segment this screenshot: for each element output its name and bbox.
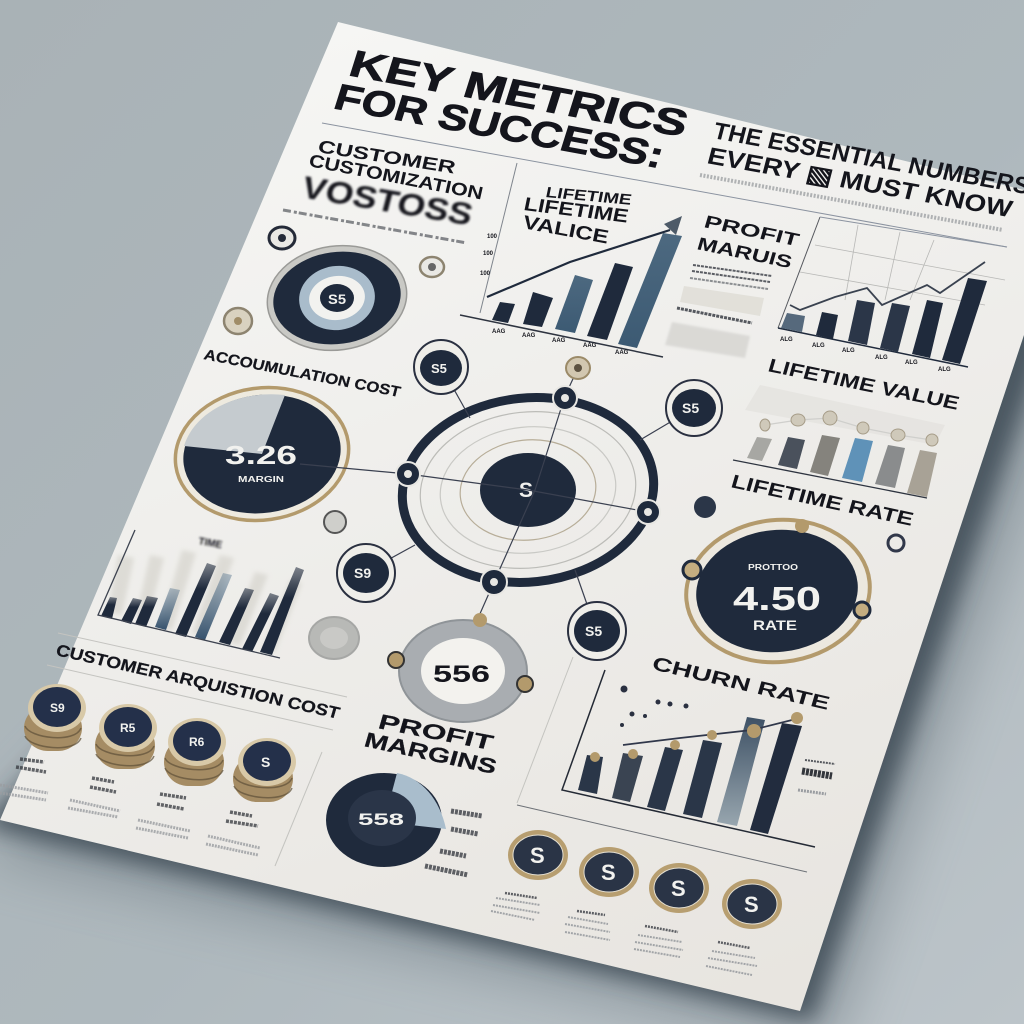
axis labels: ALG [812, 343, 825, 349]
subtitle: EVERY ▧ MUST KNOW [704, 143, 1016, 223]
heading: LIFETIME [544, 184, 633, 209]
panel: profit margin gauge: 556 [433, 661, 490, 688]
axis labels [480, 234, 629, 356]
coin 1 [508, 830, 568, 880]
heading: MARUIS [695, 234, 795, 272]
heading: profit margins: MARGINS [362, 729, 499, 779]
panel: churn chart [517, 657, 835, 872]
stack 4: S [261, 754, 270, 770]
axis labels: ALG [780, 337, 793, 343]
panel: mid left bar chart [98, 530, 359, 659]
panel: profit margin gauge [388, 613, 533, 722]
satellite badges: S9 [354, 565, 371, 581]
right caption [798, 760, 835, 794]
stack 3 [164, 718, 226, 786]
ring nodes [396, 386, 660, 595]
coin 3: S [671, 876, 686, 901]
axis labels: 100 [480, 271, 491, 277]
axis labels: 100 [487, 234, 498, 240]
central target hub [300, 340, 722, 660]
axis labels: ALG [842, 348, 855, 354]
heading: lifetime value: LIFETIME VALUE [766, 356, 962, 415]
title [330, 44, 693, 176]
target dial [260, 237, 414, 359]
panel: profit margins text [665, 212, 820, 358]
satellite badges: S5 [585, 623, 602, 639]
axis labels [780, 337, 951, 373]
bottom coin row [508, 830, 782, 929]
axis labels: ALG [938, 367, 951, 373]
panel: mid left bar chart: TIME [197, 536, 223, 551]
heading [695, 212, 802, 272]
axis labels: AAG [583, 343, 597, 349]
heading [521, 184, 633, 249]
rate gauge: RATE [753, 617, 797, 633]
coin 1: S [530, 843, 545, 868]
axis labels: AAG [552, 338, 566, 344]
coin 3 [649, 863, 709, 913]
heading: PROFIT [702, 212, 802, 250]
coin 4: S [744, 892, 759, 917]
satellite badges [337, 340, 722, 660]
subtitle: THE ESSENTIAL NUMBERS [710, 118, 1024, 200]
heading: customer acquisition cost: CUSTOMER ARQUISTION COST [54, 642, 342, 723]
coin 2 [579, 847, 639, 897]
satellite badges: S5 [431, 361, 447, 376]
heading: lifetime rate: LIFETIME RATE [729, 472, 916, 531]
caption lines [283, 210, 467, 243]
central target hub: S [519, 479, 533, 502]
axis labels: ALG [875, 355, 888, 361]
axis labels: AAG [615, 350, 629, 356]
stack 3: R6 [189, 735, 205, 749]
panel: lifetime value chart [460, 163, 682, 357]
coin 4 [722, 879, 782, 929]
heading: churn rate: CHURN RATE [650, 654, 832, 715]
target dial: S5 [328, 291, 346, 307]
close cast shadow [0, 300, 1024, 1022]
trend line [790, 262, 985, 310]
pie gauge [167, 377, 357, 533]
small gray coin [309, 617, 359, 659]
coin 2: S [601, 860, 616, 885]
trend line [623, 718, 800, 745]
title: KEY METRICS [344, 44, 693, 145]
stack 4 [233, 738, 296, 802]
panel: lifetime value bars [733, 385, 945, 498]
connector lines [300, 368, 694, 630]
coin captions [0, 759, 260, 855]
scattered dots [620, 686, 688, 727]
rate gauge: 4.50 [733, 580, 821, 617]
donut pie chart [326, 773, 482, 875]
wide cast shadow [0, 300, 1024, 1024]
axis labels: AAG [492, 329, 506, 335]
stack 2 [95, 704, 157, 769]
heading: customer acquisition: VOSTOSS [298, 169, 477, 232]
text lines [665, 265, 772, 358]
heading: customer acquisition [298, 136, 485, 232]
axis labels: 100 [483, 251, 494, 257]
bottom captions [491, 893, 757, 975]
trend arrow [487, 216, 682, 297]
faded bars [108, 550, 302, 652]
heading: VALICE [521, 212, 610, 249]
stack 1 [24, 684, 86, 751]
title: FOR SUCCESS: [330, 77, 669, 176]
bars [781, 278, 987, 364]
bars [492, 233, 682, 348]
coin stacks [24, 684, 296, 802]
pie gauge: MARGIN [238, 475, 284, 484]
panel: top right chart [778, 217, 1007, 373]
heading: LIFETIME [522, 194, 630, 228]
panel: customer acquisition target [224, 136, 485, 359]
stack 1: S9 [50, 701, 65, 715]
satellite badges: S5 [682, 400, 699, 416]
heading: profit margins: PROFIT [376, 711, 496, 755]
heading: customer acquisition: CUSTOMER [316, 136, 458, 177]
heading: profit margins [362, 711, 499, 779]
heading: customer acquisition: CUSTOMIZATION [307, 150, 485, 204]
rate gauge: PROTTOO [748, 563, 798, 572]
pie gauge: 3.26 [225, 440, 297, 470]
rate gauge [679, 496, 904, 671]
axis labels: AAG [522, 333, 536, 339]
solid bars [101, 563, 304, 655]
stack 2: R5 [120, 721, 136, 735]
axis [460, 315, 663, 357]
small coin icons [224, 227, 444, 334]
donut pie chart: 558 [358, 810, 404, 829]
axis labels: ALG [905, 360, 918, 366]
heading: acquisition cost: ACCOUMULATION COST [202, 346, 402, 401]
